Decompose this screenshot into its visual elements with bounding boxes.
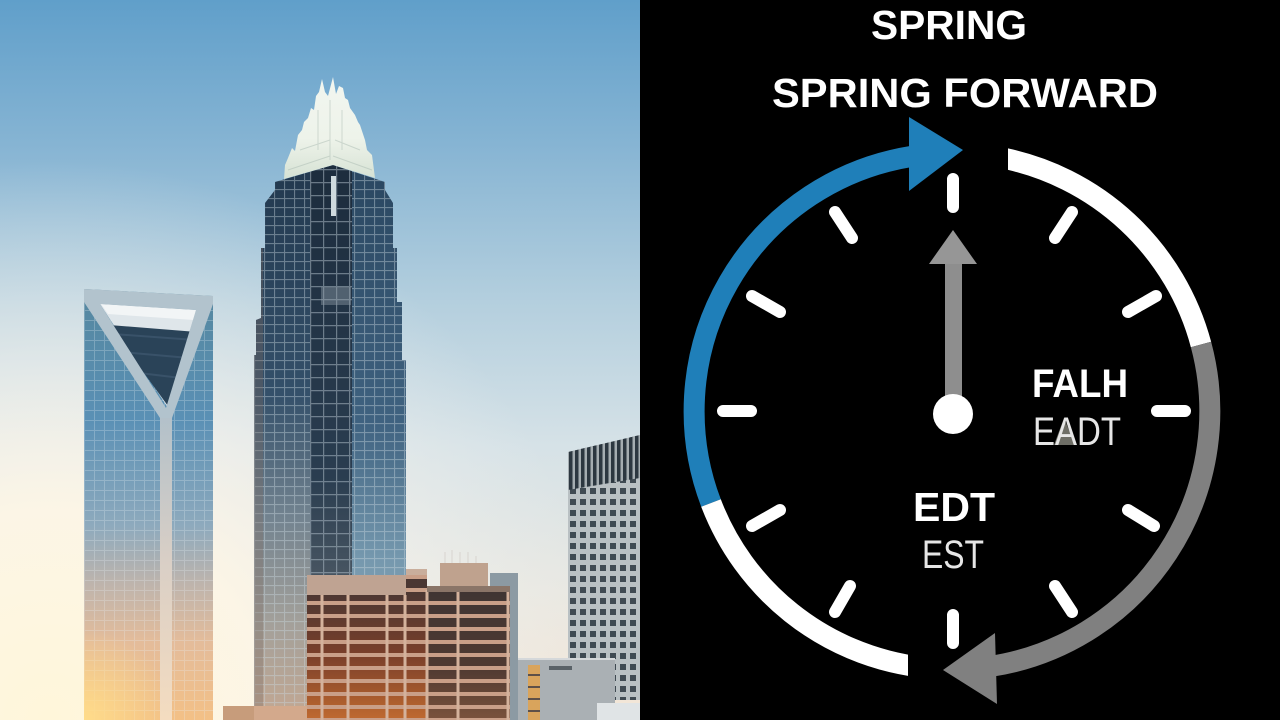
heading: spring: SPRING	[871, 2, 1027, 48]
panel: clock diagram	[684, 10, 1220, 704]
clock hand	[929, 230, 977, 398]
clock centre	[933, 394, 973, 434]
building: central skyscraper	[254, 160, 406, 720]
building: left angular tower	[84, 289, 213, 720]
heading: spring forward: SPRING FORWARD	[772, 70, 1158, 116]
blue arc with arrow	[694, 117, 963, 503]
smudge on label	[1054, 418, 1075, 445]
white arc: bottom left	[711, 503, 916, 666]
label: fall: FALH	[1032, 362, 1128, 406]
clock ticks	[723, 179, 1185, 643]
label: edt: EDT	[913, 484, 995, 530]
building: low blocks	[223, 550, 640, 720]
building: spired crown	[284, 77, 375, 179]
white arc: top right	[1000, 158, 1201, 344]
photo panel: skyline	[0, 0, 640, 720]
building: right tower	[568, 435, 640, 700]
label: edt right: EADT	[1033, 410, 1121, 454]
grey arc with arrow	[943, 344, 1210, 704]
label: est: EST	[922, 533, 984, 577]
